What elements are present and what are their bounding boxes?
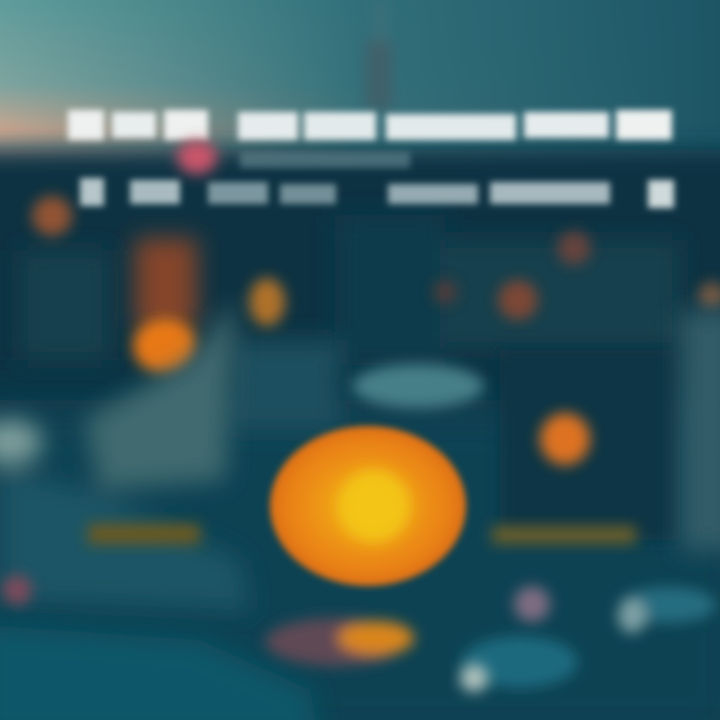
- title: blurred headline blocks: [68, 110, 674, 208]
- label: right blurred gold text: [492, 526, 636, 544]
- accents: small floating shapes: [2, 575, 716, 633]
- buildings: mid-tone dark columns: [20, 215, 680, 430]
- building: pale grey-teal shapes on left: [0, 300, 250, 610]
- reflection: orange glow beneath coin: [265, 618, 414, 666]
- landmark tower silhouette: [366, 0, 392, 110]
- flame glow: left tower: [133, 238, 197, 374]
- icon: large orange coin: [270, 426, 466, 586]
- lights: orange city glows: [32, 196, 720, 326]
- title: red accent mark: [177, 140, 217, 174]
- pill: pale teal ellipse above coin: [352, 364, 484, 408]
- panel: right dark teal box with orange dot: [500, 310, 720, 550]
- label: left blurred gold text: [88, 524, 200, 544]
- foreground: teal bottom surfaces: [0, 625, 578, 720]
